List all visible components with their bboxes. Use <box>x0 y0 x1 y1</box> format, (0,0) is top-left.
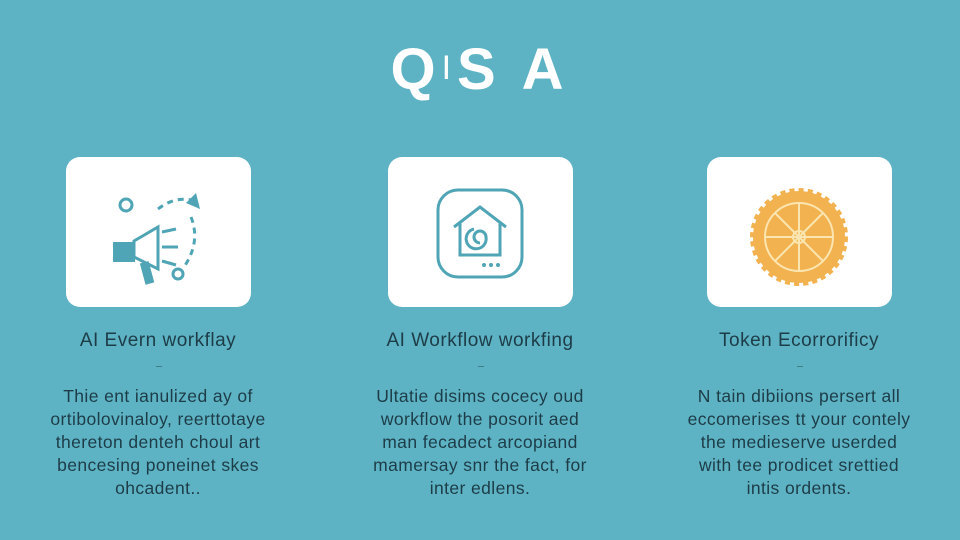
icon: smart home <box>436 188 524 278</box>
panel: card 1 <box>66 157 251 307</box>
text block 1 <box>50 386 266 498</box>
text block 3: the medieserve userded <box>701 432 897 452</box>
text block 1: thereton denteh choul art <box>56 432 260 452</box>
text block 2: workflow the posorit aed <box>381 409 579 429</box>
text block 1: bencesing poneinet skes <box>57 455 259 475</box>
icon: megaphone <box>113 193 200 285</box>
icon: token wheel <box>750 188 848 286</box>
heading 3: Token Ecorrorificy <box>719 330 879 351</box>
text block 3: N tain dibiions persert all <box>698 386 900 406</box>
text block 1: ortibolovinaloy, reerttotaye <box>50 409 266 429</box>
text block 2: inter edlens. <box>430 478 530 498</box>
text block 3: with tee prodicet srettied <box>699 455 899 475</box>
text block 3: intis ordents. <box>747 478 851 498</box>
text block 2: Ultatie disims cocecy oud <box>376 386 584 406</box>
panel: card 3 <box>707 157 892 307</box>
title: QIS A <box>390 37 570 102</box>
heading 2: AI Workflow workfing <box>386 330 574 351</box>
text block 2: mamersay snr the fact, for <box>373 455 587 475</box>
text block 3: eccomerises tt your contely <box>688 409 910 429</box>
text block 3 <box>688 386 910 498</box>
text block 2: man fecadect arcopiand <box>382 432 578 452</box>
heading 1: AI Evern workflay <box>80 330 236 351</box>
text block 1: ohcadent.. <box>115 478 201 498</box>
panel: card 2 <box>388 157 573 307</box>
text block 2 <box>373 386 587 498</box>
text block 1: Thie ent ianulized ay of <box>63 386 253 406</box>
